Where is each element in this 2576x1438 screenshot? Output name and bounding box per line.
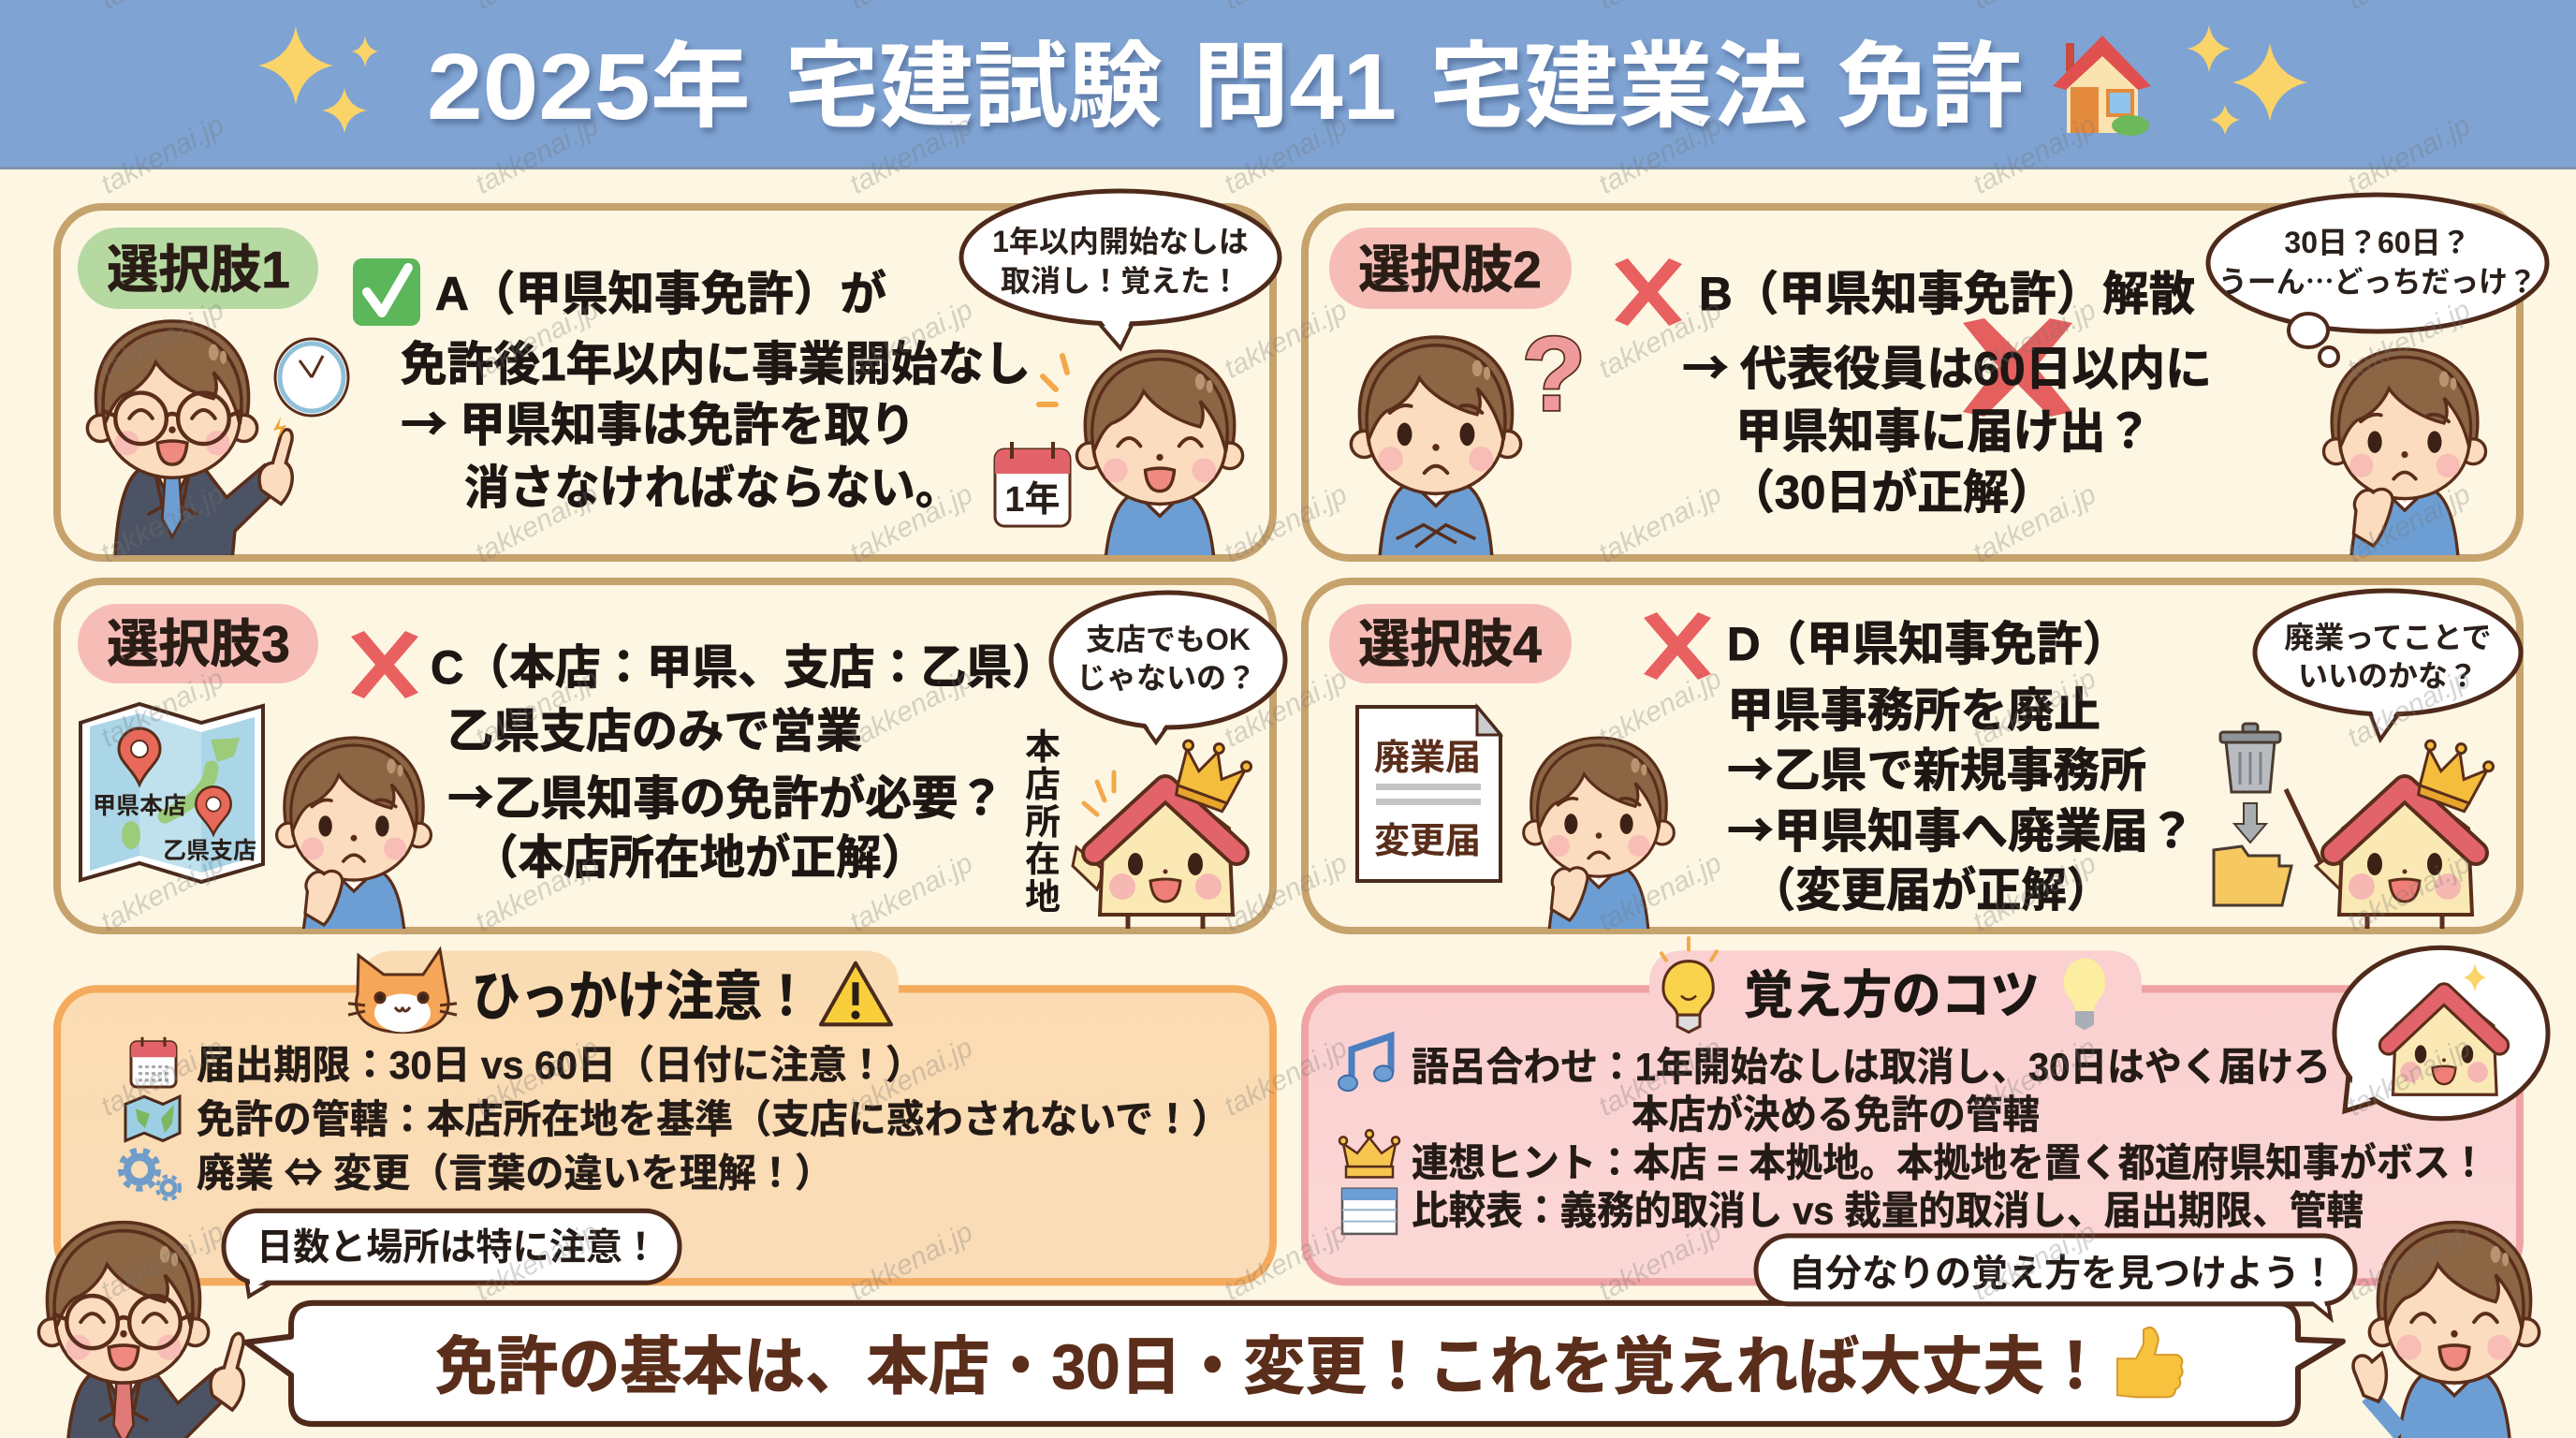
watermarks: takkenai.jp [470,1032,604,1123]
watermarks: takkenai.jp [95,1216,229,1307]
watermarks: takkenai.jp [1219,110,1353,200]
watermarks: takkenai.jp [1968,294,2101,385]
watermarks: takkenai.jp [2342,478,2476,569]
option C text: →乙県知事の免許が必要？ [447,761,1004,829]
watermarks: takkenai.jp [2342,294,2476,385]
title: 問41 [1193,35,1397,139]
option D text: D（甲県知事免許） [1727,618,2129,670]
icon: cat [348,949,457,1033]
watermarks: takkenai.jp [470,663,604,754]
vertical label: 本店所在地: 店 [1025,766,1061,805]
panel: ひっかけ注意 [57,949,1273,1282]
tab: 選択肢4 [1329,604,1572,683]
watermarks: takkenai.jp [844,294,978,385]
panel: 選択肢1 [53,189,1282,562]
option D text: →乙県で新規事務所 [1727,733,2146,800]
character: thinking boy [1522,736,1676,929]
watermarks: takkenai.jp [1593,478,1727,569]
tab: 選択肢3 [78,604,318,683]
watermarks: takkenai.jp [470,1216,604,1307]
watermarks: takkenai.jp [2342,1216,2476,1307]
option B text [1682,268,2212,519]
list item: 語呂合わせ: 本店が決める免許の管轄 [1632,1093,2040,1137]
icon: green check [353,258,420,326]
vertical label: 本店所在地: 所 [1025,803,1061,843]
watermarks: takkenai.jp [2342,847,2476,938]
option A text: A（甲県知事免許）が [435,268,886,320]
icon: warning triangle [821,963,891,1024]
option A text: 消さなければならない。 [464,462,960,514]
watermarks: takkenai.jp [844,1216,978,1307]
character: house mascot with pointer [2286,732,2497,929]
list item: 届出期限: 届出期限：30日 vs 60日（日付に注意！） [197,1042,924,1087]
icon: calendar 1年: 1年 [1004,480,1061,520]
tab: 選択肢1 [78,227,318,309]
conclusion banner: 免許の基本は、本店・30日・変更！これを覚えれば大丈夫！ [435,1331,2106,1402]
icon: rays [1039,356,1067,404]
speech bubble: 1年以内: 1年以内開始なしは [992,225,1249,258]
list item: 語呂合わせ: 語呂合わせ：1年開始なしは取消し、30日はやく届けろ [1412,1044,2331,1089]
option D text: 甲県事務所を廃止 [1727,684,2100,737]
watermarks: takkenai.jp [1968,663,2101,754]
option B text: （30日が正解） [1729,466,2055,519]
panel: 覚え方のコツ [1305,938,2520,1282]
watermarks: takkenai.jp [1219,1216,1353,1307]
heading: ひっかけ注意！ [472,967,811,1027]
icon: red cross [1615,258,1682,326]
speech bubble: 自分なりの: 自分なりの覚え方を見つけよう！ [1789,1253,2336,1294]
character: happy boy [1075,349,1245,555]
thought bubble: 30日？60日？ [2208,195,2547,366]
icon: folder [2214,846,2291,905]
speech bubble: 廃業ってことで [2255,591,2521,740]
character: boy arms crossed [1350,335,1522,555]
watermarks: takkenai.jp [1968,847,2101,938]
speech bubble: 1年以内: 取消し！覚えた！ [1001,264,1240,298]
tab: 選択肢4: 選択肢4 [1358,615,1542,673]
option C text [431,641,1058,884]
icon: trash can [2220,724,2280,792]
character: teacher bottom left [38,1223,243,1438]
icon: thumbs up [2117,1328,2183,1397]
speech bubble: 支店でもOK: 支店でもOK [1086,623,1251,656]
thought bubble: 30日？60日？: 30日？60日？ [2284,226,2471,259]
tab: 選択肢2 [1329,227,1572,309]
watermarks: takkenai.jp [844,1032,978,1123]
watermarks: takkenai.jp [844,663,978,754]
watermarks: takkenai.jp [1968,110,2101,200]
icon: calendar 1年 [995,442,1070,526]
option B text: 代表役員は60日以内に [1740,343,2212,395]
panel: 選択肢4 [1305,581,2521,972]
vertical label: 本店所在地: 本 [1025,728,1061,768]
icon: big faded cross [1963,318,2072,417]
watermarks: takkenai.jp [1593,663,1727,754]
speech bubble: 日数と場所: 日数と場所は特に注意！ [256,1226,659,1269]
title: 2025年 [427,35,751,139]
vertical label: 本店所在地: 在 [1025,841,1061,880]
speech bubble: 廃業ってことで: 廃業ってことで [2284,621,2492,654]
watermarks: takkenai.jp [470,847,604,938]
option B text: 甲県知事に届け出？ [1735,405,2152,458]
watermarks: takkenai.jp [2342,1032,2476,1123]
heading: 覚え方のコツ [1744,965,2040,1024]
watermarks: takkenai.jp [1968,478,2101,569]
heading tab [1649,950,2142,993]
speech bubble: 支店でもOK [1051,593,1285,742]
character: thinking boy [2321,347,2488,555]
icon: map of Japan [80,704,263,882]
watermarks: takkenai.jp [844,478,978,569]
watermarks: takkenai.jp [1593,1216,1727,1307]
title: 宅建試験 [784,35,1163,139]
tab: 選択肢3: 選択肢3 [107,615,290,673]
watermarks: takkenai.jp [1593,110,1727,200]
list item: 比較表: 比較表：義務的取消し vs 裁量的取消し、届出期限、管轄 [1412,1188,2364,1233]
option A text [401,268,1031,514]
watermarks: takkenai.jp [470,478,604,569]
watermarks: takkenai.jp [1593,294,1727,385]
speech bubble: 1年以内 [961,191,1280,348]
option B text: → [1682,331,1729,399]
icon: question mark: ? [1522,315,1586,433]
icon: map of Japan: 甲県本店 [93,793,186,819]
watermarks: takkenai.jp [95,478,229,569]
icon: pale bulb [2064,959,2105,1031]
tab: 選択肢1: 選択肢1 [107,241,290,299]
watermarks: takkenai.jp [470,110,604,200]
watermarks: takkenai.jp [844,110,978,200]
character: house mascot with crown [1073,732,1255,929]
option D text: →甲県知事へ廃業届？ [1727,794,2195,861]
watermarks: takkenai.jp [95,294,229,385]
title: 免許 [1837,35,2024,139]
icon: map of Japan: 乙県支店 [163,838,256,864]
icon: light bulb smiling [1661,938,1717,1033]
watermarks: takkenai.jp [1219,1032,1353,1123]
title: 宅建業法 [1429,35,1808,139]
lower section [38,938,2548,1438]
option A text: 甲県知事は免許を取り [460,399,915,451]
watermarks: takkenai.jp [1219,663,1353,754]
watermarks: takkenai.jp [95,663,229,754]
panel: 選択肢3 [57,581,1285,977]
watermarks: takkenai.jp [1219,847,1353,938]
watermarks: takkenai.jp [1968,1216,2101,1307]
option A text: → [401,388,447,455]
icon: sparkles left [258,26,378,133]
watermarks: takkenai.jp [844,847,978,938]
watermarks: takkenai.jp [95,847,229,938]
watermarks: takkenai.jp [95,110,229,200]
tab: 選択肢2: 選択肢2 [1358,241,1542,299]
vertical label: 本店所在地: 地 [1025,878,1061,917]
character: teacher pointing [87,321,292,585]
character: thinking boy [275,736,432,929]
heading tab [361,950,899,993]
watermarks: takkenai.jp [1593,847,1727,938]
panel: 選択肢2 [1305,195,2547,601]
list item: 免許の管轄: 免許の管轄：本店所在地を基準（支店に惑わされないで！） [197,1097,1230,1141]
title [427,35,2024,139]
header band [0,0,2576,169]
character: boy bottom right [2353,1223,2539,1438]
option C text: 乙県支店のみで営業 [447,705,862,757]
option B text: B（甲県知事免許）解散 [1699,268,2195,320]
list item: 連想ヒント: 連想ヒント：本店 = 本拠地。本拠地を置く都道府県知事がボス！ [1412,1140,2487,1185]
icon: sparkles right [2188,25,2307,135]
list item: 廃業 ⇔ 変更: 廃業 ⇔ 変更（言葉の違いを理解！） [197,1141,833,1198]
icon: house emoji [2053,36,2151,136]
watermarks: takkenai.jp [1968,1032,2101,1123]
speech bubble: 日数と場所 [224,1211,680,1297]
option C text: （本店所在地が正解） [473,831,927,884]
watermarks: takkenai.jp [2342,663,2476,754]
option D text [1727,618,2195,917]
icon: red cross [351,631,418,698]
icon: clock [273,339,348,440]
watermarks: takkenai.jp [95,1032,229,1123]
icon: document 廃業届 変更届: 変更届 [1374,822,1481,861]
watermarks: takkenai.jp [2342,110,2476,200]
option A text: 免許後1年以内に事業開始なし [401,338,1031,390]
thought bubble: 30日？60日？: うーん…どっちだっけ？ [2218,258,2537,301]
option C text: C（本店：甲県、支店：乙県） [431,641,1058,694]
icon: red cross [1644,612,1711,680]
speech bubble: 支店でもOK: じゃないの？ [1076,661,1256,695]
conclusion banner [246,1303,2343,1424]
watermarks: takkenai.jp [1219,294,1353,385]
house bubble [2334,947,2548,1119]
icon: document 廃業届 変更届: 廃業届 [1374,739,1481,778]
watermarks: takkenai.jp [1219,478,1353,569]
icon: arrow down [2234,803,2266,843]
list item: 語呂合わせ [1339,1036,2331,1137]
icon: document 廃業届 変更届 [1357,707,1500,881]
speech bubble: 自分なりの [1756,1236,2355,1318]
speech bubble: 廃業ってことで: いいのかな？ [2298,659,2478,693]
watermarks: takkenai.jp [470,294,604,385]
option D text: （変更届が正解） [1750,864,2112,917]
watermarks: takkenai.jp [1593,1032,1727,1123]
